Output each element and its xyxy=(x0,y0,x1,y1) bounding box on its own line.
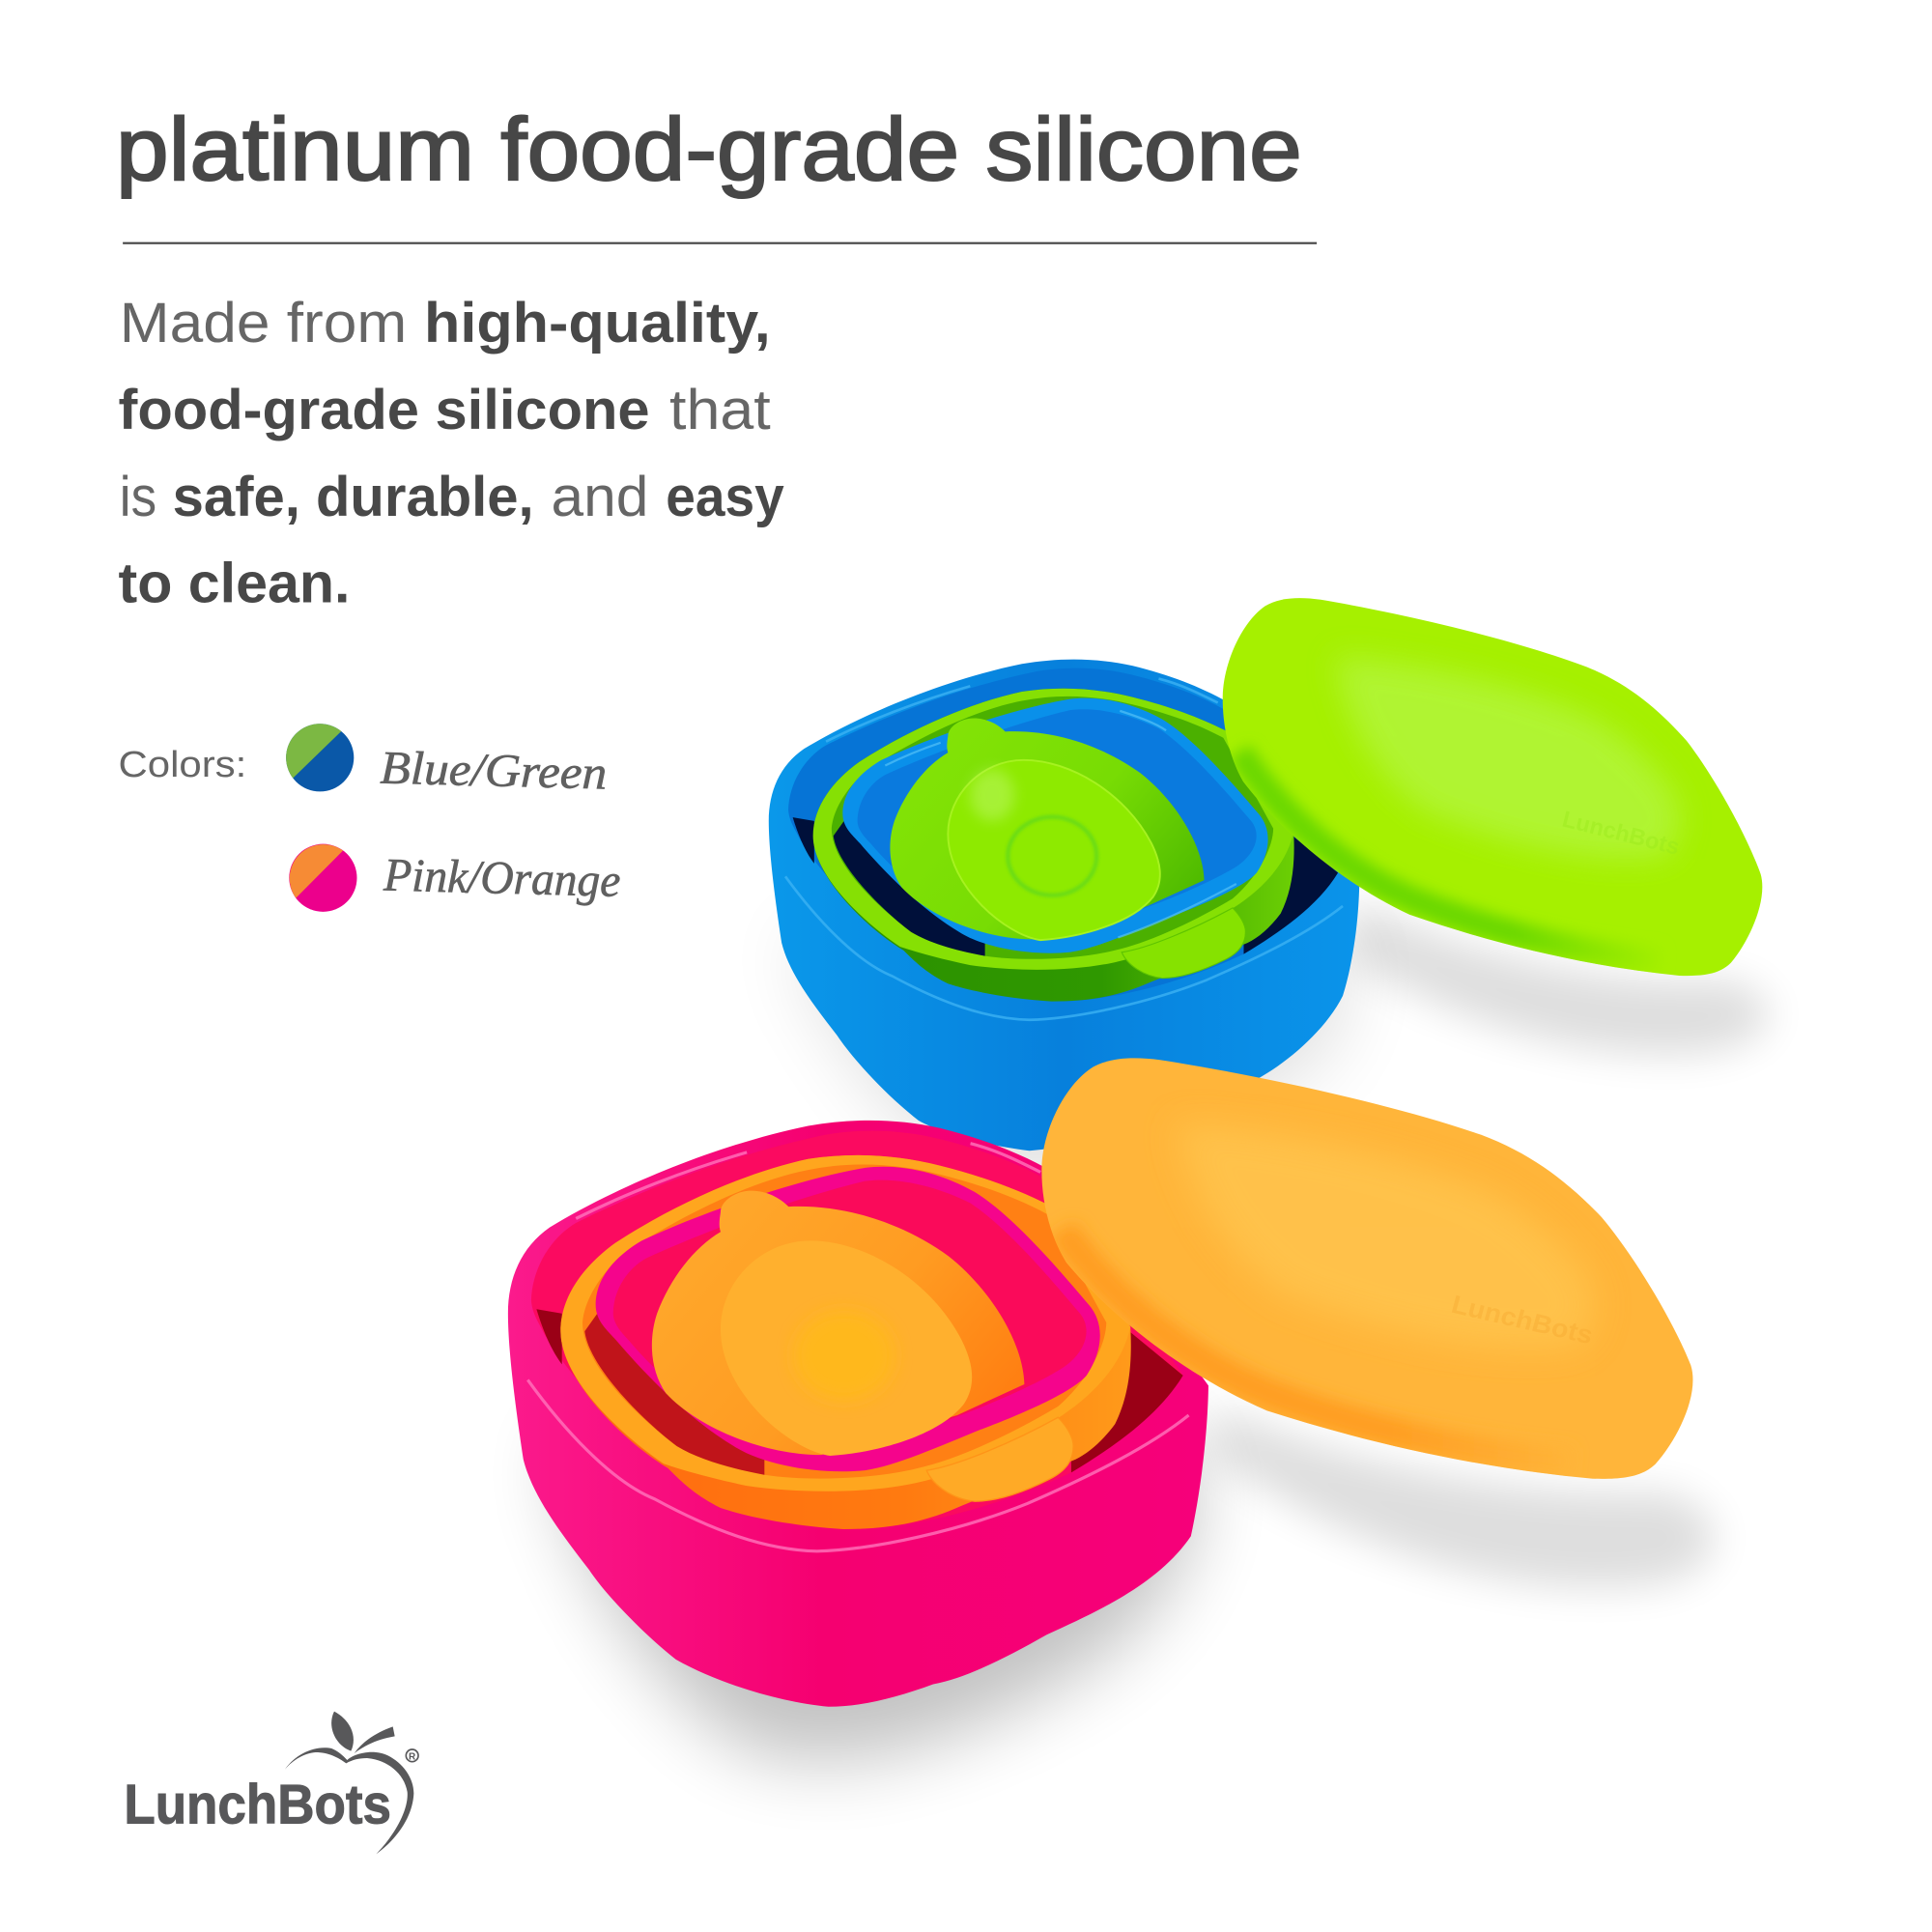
logo apple mark: R xyxy=(409,1751,415,1762)
swatch: pink/orange xyxy=(289,844,356,912)
green tab xyxy=(1122,908,1245,979)
body text: and xyxy=(552,466,648,528)
swatch: blue/green xyxy=(286,724,354,791)
body text: is xyxy=(120,466,156,528)
title divider xyxy=(123,242,1317,244)
small green lid, front xyxy=(948,760,1160,940)
logo: LunchBots xyxy=(124,1712,418,1854)
middle box interior xyxy=(582,1165,1106,1479)
lid embossed logo: LunchBots xyxy=(1560,808,1682,861)
colors label: Colors: xyxy=(119,744,246,785)
middle orange box xyxy=(560,1155,1131,1529)
colors legend xyxy=(119,724,621,912)
outer pink box xyxy=(508,1121,1208,1707)
small orange lid, back xyxy=(652,1191,1024,1455)
inner blue box xyxy=(842,698,1268,953)
body text: to clean. xyxy=(119,552,350,614)
small orange lid, front xyxy=(721,1240,972,1456)
product: blue and green container set xyxy=(769,660,1359,1151)
orange tab xyxy=(926,1417,1073,1501)
title: platinum food-grade silicone xyxy=(116,100,1302,199)
product: orange lid xyxy=(1041,1058,1692,1479)
middle box interior xyxy=(832,696,1273,959)
outer blue box xyxy=(769,660,1359,1151)
lid centre ring xyxy=(1008,817,1096,895)
label: pink/orange: Pink/Orange xyxy=(383,849,621,907)
small green lid, back xyxy=(890,719,1205,939)
body text: that xyxy=(669,379,771,441)
logo apple mark xyxy=(285,1712,418,1854)
product: lime green lid xyxy=(1223,598,1762,976)
lid centre xyxy=(794,1311,895,1401)
body text: safe, durable, xyxy=(173,466,534,528)
middle green box xyxy=(813,689,1294,1002)
body text: high-quality, xyxy=(424,292,771,355)
outer box interior xyxy=(531,1131,1183,1529)
body text: food-grade silicone xyxy=(119,379,650,441)
product: pink and orange container set xyxy=(508,1121,1208,1707)
body text: easy xyxy=(666,466,784,528)
body text xyxy=(119,292,784,614)
lid embossed logo: LunchBots xyxy=(1449,1290,1596,1350)
logo wordmark: LunchBots xyxy=(124,1775,391,1836)
body text: Made from xyxy=(120,292,407,355)
shadows under products xyxy=(554,900,1769,1760)
label: blue/green: Blue/Green xyxy=(380,742,608,800)
outer box interior xyxy=(788,668,1338,1002)
inner pink box xyxy=(596,1167,1100,1471)
